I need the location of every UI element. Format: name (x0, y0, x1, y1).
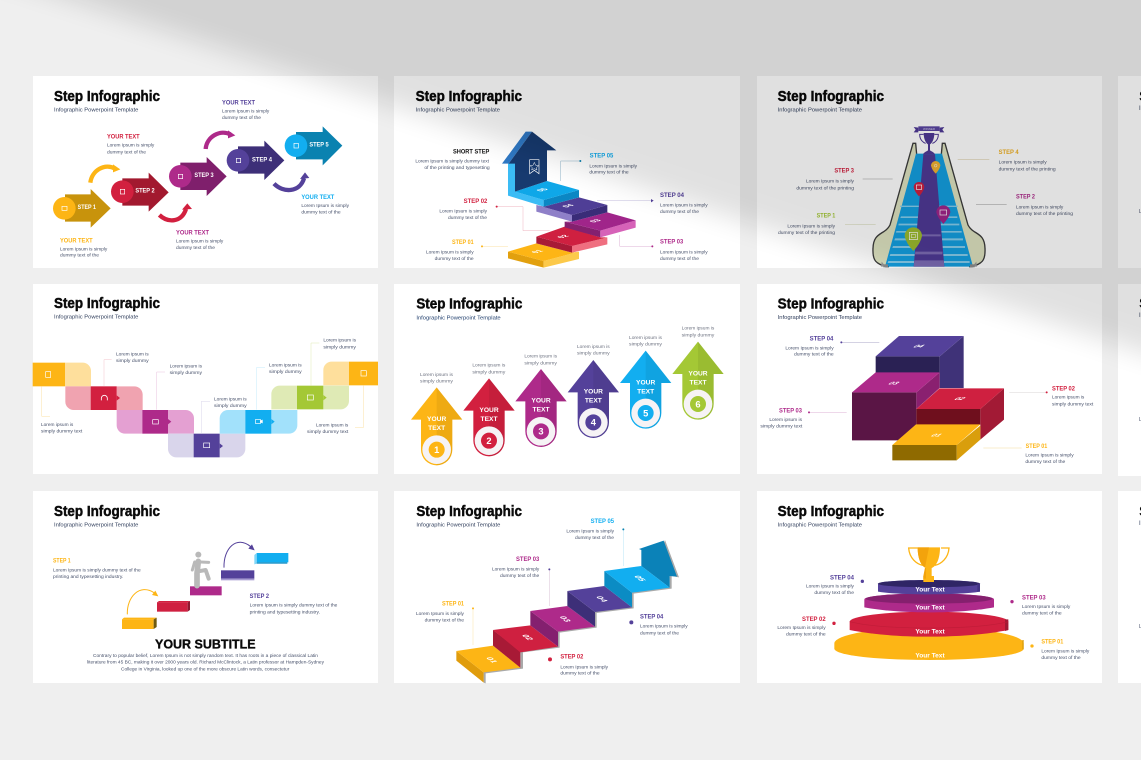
arrow 3: YOUR (531, 398, 551, 405)
callout: step 01: Lorem Ipsum is simply (1041, 648, 1090, 654)
callout: step 2: dummy text of the printing (1016, 211, 1073, 217)
panel: 3D blocks (757, 284, 1102, 474)
callout: step 02 (1009, 385, 1094, 407)
icon: green pin (905, 227, 922, 251)
arrow: step 3 (169, 157, 227, 196)
step 04 purple (536, 197, 607, 222)
bar: purple (221, 570, 254, 580)
callout: step 2: STEP 2 (1016, 194, 1035, 201)
text: arrow 4: Lorem ipsum is (577, 344, 610, 350)
subtitle: Infographic Powerpoint Template (54, 315, 138, 321)
staircase shadow (484, 540, 679, 683)
subtitle: Infographic Powerpoint Template (778, 315, 862, 321)
text: arrow 2: simply dummy (472, 369, 506, 375)
text: block 3 (170, 364, 203, 376)
block 01: 01 (928, 433, 945, 438)
text: step 2: printing and typesetting industry. (250, 609, 320, 615)
title: Step Infographic (778, 504, 884, 520)
text: red callout (107, 134, 155, 155)
text: yellow callout (60, 237, 108, 259)
callout: step 1: Lorem Ipsum is simply (787, 224, 835, 230)
curved arrow: purple (274, 172, 309, 190)
text: blue callout: Lorem Ipsum is simply (301, 203, 349, 209)
text: red callout: YOUR TEXT (107, 134, 140, 141)
disc: yellow (834, 627, 1024, 660)
step 03: 03 (557, 616, 574, 623)
text: step 1: STEP 1 (53, 558, 71, 565)
panel: six up arrows (394, 284, 740, 474)
text: arrow 3: simply dummy (524, 361, 558, 367)
callout: step 1: dummy text of the printing (778, 230, 835, 236)
block: blue (220, 410, 297, 434)
text: arrow 2: Lorem ipsum is (472, 363, 506, 369)
text: purple callout: YOUR TEXT (222, 99, 255, 106)
paragraph (87, 653, 324, 672)
arrow 1: TEXT (428, 425, 445, 432)
text: block 2: Lorem ipsum is (116, 351, 149, 357)
arrow 4: 4 (591, 418, 597, 428)
block 03 (852, 372, 940, 440)
callout: step 01: Lorem Ipsum is simply (416, 611, 464, 617)
block 01 (892, 424, 980, 460)
callout: step 02: STEP 02 (802, 616, 826, 623)
icon: red pin (914, 182, 924, 196)
arrow: step 1: STEP 1 (78, 205, 97, 211)
arrow 2: 2 (486, 436, 492, 446)
arrow 5 (620, 351, 671, 429)
bar: yellow (122, 618, 157, 629)
connector lines (42, 343, 363, 433)
block 04 (876, 336, 964, 388)
callout: step 02: Lorem Ipsum is simply (777, 625, 826, 631)
step 04 purple: 04 (560, 203, 577, 208)
text: short step (415, 148, 490, 171)
panel: zig-zag blocks (33, 284, 378, 474)
bar: magenta (190, 586, 222, 595)
callout: step 4: STEP 4 (999, 149, 1019, 156)
subtitle: Infographic Powerpoint Template (416, 315, 501, 321)
text: block 7 (307, 423, 349, 435)
callout: step 1 (778, 213, 876, 236)
callout: step 04 (629, 613, 688, 636)
paragraph: College in Virginia, looked up one of the more obscure Latin words, consectetur (121, 666, 290, 672)
callout: step 03: STEP 03 (516, 556, 540, 563)
text: arrow 1: Lorem ipsum is (420, 372, 453, 378)
callout: step 04: Lorem Ipsum is simply (785, 345, 834, 351)
labels: your text on discs: Your Text (915, 628, 945, 635)
callout: step 01: dummy text of the (1025, 459, 1066, 465)
text: arrow 5: Lorem ipsum is (629, 335, 662, 341)
callout: step 2 (976, 194, 1073, 217)
callout: step 01: STEP 01 (442, 600, 464, 607)
text: step 2 (250, 593, 338, 615)
text: arrow 4 (577, 344, 610, 357)
text: magenta callout (176, 229, 224, 251)
title: Step Infographic (416, 89, 522, 105)
arrow 1: 1 (434, 445, 439, 455)
arrow 5: 5 (643, 408, 648, 418)
callout: step 05: dummy text of the (589, 170, 629, 176)
callout: step 03 (760, 407, 847, 429)
callout: step 03: STEP 03 (779, 407, 802, 414)
arrow 3: TEXT (532, 407, 550, 414)
step 03 magenta (565, 212, 636, 237)
arrow: step 4: STEP 4 (252, 157, 273, 163)
step 02 red (536, 227, 607, 253)
step 03 (530, 606, 595, 647)
icon: trophy (909, 547, 949, 582)
text: block 4 (214, 397, 247, 409)
title: Step Infographic (778, 89, 884, 105)
panel: arrow steps (33, 76, 378, 268)
panel: diagonal staircase (394, 491, 740, 683)
text: arrow 1: simply dummy (420, 379, 454, 385)
text: short step: Lorem Ipsum is simply dummy text (415, 158, 490, 164)
text: block 2 (116, 351, 149, 364)
callout: step 01 (416, 600, 474, 645)
callout: step 02: dummy text of the (786, 632, 826, 638)
panel: cropped fourth column: I (1139, 313, 1141, 319)
text: arrow 6 (682, 326, 715, 338)
callout: step 01: dummy text of the (1041, 655, 1081, 661)
text: arrow 1 (420, 372, 454, 385)
callout: step 01: Lorem Ipsum is simply (426, 249, 474, 255)
callout: step 03 (620, 235, 708, 262)
callout: step 02: Lorem ipsum is (1052, 395, 1085, 401)
text: block 5: simply dummy (269, 369, 302, 375)
subtitle: Infographic Powerpoint Template (778, 523, 862, 529)
callout: step 05: STEP 05 (590, 153, 614, 160)
text: block 7: Lorem ipsum is (316, 423, 349, 429)
paragraph: Contrary to popular belief, Lorem Ipsum is not simply random text. It has roots in a piece of classical Latin (93, 653, 318, 659)
callout: step 01: dummy text of the (435, 256, 474, 262)
callout: step 01 (1030, 639, 1090, 661)
callout: step 02 (777, 616, 836, 638)
arrow 4 (568, 360, 619, 438)
arrow 6 (672, 342, 724, 420)
text: step 2: Lorem Ipsum is simply dummy text of the (250, 603, 338, 609)
text: short step: of the printing and typesetting (424, 165, 490, 171)
title: Step Infographic (416, 297, 522, 313)
arrow 5: TEXT (637, 388, 654, 395)
arrow 3: 3 (538, 427, 544, 437)
title: Step Infographic (54, 504, 160, 520)
text: block 1: Lorem ipsum is (41, 422, 74, 428)
subtitle: Infographic Powerpoint Template (54, 108, 138, 114)
callout: step 3 (796, 168, 893, 191)
arrow: step 2 (111, 173, 169, 212)
callout: step 02: Lorem Ipsum is simply (439, 208, 487, 214)
labels: your text on discs: Your Text (915, 653, 945, 660)
heading: your subtitle: YOUR SUBTITLE (155, 637, 256, 651)
callout: step 02 (548, 654, 608, 677)
disc: magenta (864, 593, 994, 612)
disc: red (850, 612, 1008, 637)
block: green (271, 386, 349, 409)
callout: step 01 (426, 239, 508, 262)
curved arrow: yellow (127, 590, 158, 614)
icon: trophy: WINNER (923, 127, 936, 131)
panel: podium with trophy (757, 491, 1102, 683)
step 04 (567, 586, 632, 627)
curved arrow: red (159, 203, 192, 220)
callout: step 04 (806, 574, 864, 596)
icon: trophy (914, 126, 944, 154)
text: magenta callout: dummy text of the (176, 245, 215, 251)
text: block 5: Lorem ipsum is (269, 363, 302, 369)
labels: your text on discs: Your Text (915, 604, 945, 611)
step 02 (493, 625, 558, 668)
arrow 6: YOUR (688, 370, 708, 377)
block: purple (168, 434, 245, 457)
icon: magenta pin (936, 205, 950, 224)
callout: step 03: simply dummy text (760, 423, 803, 429)
text: arrow 2 (472, 363, 506, 375)
callout: step 04 (785, 336, 879, 358)
arrow: step 4 (227, 141, 284, 180)
panel: cropped fourth column: I (1139, 106, 1141, 112)
curved arrow: magenta (206, 130, 235, 149)
step 01 yellow: 01 (529, 249, 546, 254)
step 01 yellow (508, 243, 579, 268)
text: yellow callout: Lorem Ipsum is simply (60, 246, 108, 252)
arrow 5: YOUR (636, 379, 655, 386)
block: yellow right (323, 362, 378, 385)
callout: step 04: STEP 04 (830, 574, 854, 581)
text: block 6: simply dummy (323, 344, 357, 350)
callout: step 03 (492, 556, 550, 606)
house arrow with step 05: 05 (534, 187, 551, 192)
block 02: 02 (952, 396, 969, 401)
text: step 1: Lorem Ipsum is simply dummy text of the (53, 567, 141, 573)
title: Step Infographic (416, 504, 522, 520)
callout: step 04: dummy text of the (814, 590, 854, 596)
arrow: step 1 (53, 189, 111, 228)
step 04: 04 (594, 596, 610, 603)
block 04: 04 (911, 344, 928, 348)
house arrow with step 05 (502, 132, 579, 207)
text: magenta callout: YOUR TEXT (176, 229, 209, 236)
text: arrow 3: Lorem ipsum is (524, 354, 557, 360)
callout: step 04: Lorem Ipsum is simply (660, 203, 708, 209)
callout: step 02 (439, 198, 550, 231)
callout: step 3: Lorem Ipsum is simply (806, 179, 854, 185)
step 02 red: 02 (555, 234, 571, 239)
arrow 3 (515, 369, 567, 447)
disc: purple (878, 580, 980, 594)
text: purple callout (222, 99, 270, 121)
text: yellow callout: dummy text of the (60, 253, 99, 259)
paragraph: literature from 45 BC, making it over 2000 years old. Richard McClintock, a Latin professor at Hampden-Sydney (87, 660, 324, 666)
curved arrow: yellow (90, 164, 120, 183)
callout: step 02: STEP 02 (464, 198, 488, 205)
panel: escalator (757, 76, 1102, 268)
panel: cropped fourth column: I (1139, 521, 1141, 527)
text: blue callout (301, 194, 349, 216)
callout: step 4 (958, 149, 1056, 172)
text: block 2: simply dummy (116, 358, 149, 364)
text: step 1: printing and typesetting industry. (53, 574, 123, 580)
callout: step 4: Lorem Ipsum is simply (999, 160, 1047, 166)
text: step 1 (53, 558, 141, 580)
callout: step 04: dummy text of the (794, 352, 834, 358)
callout: step 05 (566, 518, 624, 566)
callout: step 05: Lorem Ipsum is simply (566, 529, 614, 535)
callout: step 04: STEP 04 (660, 192, 684, 199)
callout: step 01: STEP 01 (1026, 443, 1048, 450)
text: arrow 6: simply dummy (682, 332, 715, 338)
text: arrow 3 (524, 354, 558, 367)
text: blue callout: dummy text of the (301, 210, 341, 216)
step 01: 01 (484, 657, 500, 664)
text: short step: SHORT STEP (453, 148, 489, 155)
callout: step 01: dummy text of the (425, 618, 464, 624)
arrow 6: 6 (695, 399, 701, 409)
callout: step 03: STEP 03 (660, 239, 684, 246)
text: arrow 5: simply dummy (629, 342, 663, 348)
bar: red (157, 601, 190, 612)
title: Step Infographic (54, 296, 160, 312)
text: yellow callout: YOUR TEXT (60, 237, 93, 244)
text: arrow 6: Lorem ipsum is (682, 326, 715, 332)
block 02 (916, 388, 1004, 440)
text: purple callout: dummy text of the (222, 115, 261, 121)
block: red (65, 386, 143, 410)
curved arrow: purple (224, 542, 255, 568)
subtitle: Infographic Powerpoint Template (54, 523, 138, 529)
callout: step 03: Lorem Ipsum is simply (492, 567, 540, 573)
labels: your text on discs (915, 587, 945, 660)
text: magenta callout: Lorem Ipsum is simply (176, 238, 224, 244)
callout: step 04 (597, 192, 708, 215)
text: step 2: STEP 2 (250, 593, 269, 600)
callout: step 05: STEP 05 (591, 518, 614, 525)
panel: isometric stairs with house arrow (394, 76, 740, 268)
text: blue callout: YOUR TEXT (301, 194, 334, 201)
text: block 5 (269, 363, 302, 375)
callout: step 01: STEP 01 (1041, 639, 1064, 646)
text: red callout: dummy text of the (107, 149, 146, 155)
text: block 4: Lorem ipsum is (214, 397, 247, 403)
labels: your text on discs: Your Text (915, 587, 945, 594)
callout: step 05: dummy text of the (575, 535, 614, 541)
text: arrow 4: simply dummy (577, 351, 610, 357)
callout: step 4: dummy text of the printing (999, 166, 1056, 172)
callout: step 1: STEP 1 (817, 213, 836, 220)
text: red callout: Lorem Ipsum is simply (107, 143, 155, 149)
callout: step 02: STEP 02 (560, 654, 584, 661)
arrow: step 5 (285, 126, 342, 165)
bar: blue (254, 553, 288, 564)
text: block 6 (323, 338, 357, 350)
callout: step 04: STEP 04 (640, 613, 664, 620)
callout: step 02: dummy text of the (560, 671, 600, 677)
panel: stepping bars with subtitle (33, 491, 378, 683)
callout: step 3: dummy text of the printing (796, 185, 854, 191)
arrow 6: TEXT (689, 379, 707, 386)
callout: step 02: Lorem Ipsum is simply (560, 664, 608, 670)
text: block 1 (41, 422, 83, 435)
callout: step 03: dummy text of the (500, 573, 540, 579)
panel: cropped fourth column (1118, 76, 1141, 683)
arrow: step 5: STEP 5 (309, 142, 329, 148)
arrow 2: TEXT (480, 416, 498, 423)
arrow 2: YOUR (479, 407, 499, 414)
callout: step 04: dummy text of the (640, 630, 679, 636)
subtitle: Infographic Powerpoint Template (778, 108, 862, 114)
text: block 7: simply dummy text (307, 429, 349, 435)
callout: step 05: Lorem Ipsum is simply (589, 163, 637, 169)
callout: step 03: Lorem Ipsum is simply (1022, 604, 1071, 610)
subtitle: Infographic Powerpoint Template (416, 108, 500, 114)
icon: climbing person (192, 552, 209, 586)
callout: step 3: STEP 3 (834, 168, 854, 175)
step 05 with arrow: 05 (632, 575, 648, 582)
step 05 with arrow (604, 541, 677, 607)
callout: step 2: Lorem Ipsum is simply (1016, 205, 1064, 211)
callout: step 01: Lorem Ipsum is simply (1025, 453, 1074, 459)
callout: step 05 (561, 153, 637, 181)
block: magenta (117, 410, 194, 434)
text: block 1: simply dummy text (41, 429, 83, 435)
callout: step 02: dummy text of the (448, 215, 487, 221)
arrow 2 (463, 378, 515, 456)
arrow 1: YOUR (427, 416, 446, 423)
callout: step 01: STEP 01 (452, 239, 474, 246)
callout: step 02: simply dummy text (1052, 401, 1094, 407)
title: Step Infographic (778, 297, 884, 313)
callout: step 01 (983, 443, 1074, 465)
text: arrow 5 (629, 335, 663, 348)
text: block 6: Lorem ipsum is (323, 338, 356, 344)
arrow 4: YOUR (584, 389, 603, 396)
subtitle: Infographic Powerpoint Template (416, 523, 500, 529)
callout: step 04: STEP 04 (810, 336, 834, 343)
icon: yellow pin (931, 161, 940, 174)
callout: step 03: Lorem ipsum is (769, 417, 802, 423)
text: block 3: Lorem ipsum is (170, 364, 202, 370)
block: yellow left (33, 363, 91, 386)
step 02: 02 (519, 634, 536, 641)
callout: step 02: STEP 02 (1052, 385, 1075, 392)
text: block 3: simply dummy (170, 370, 203, 376)
callout: step 04: dummy text of the (660, 209, 699, 215)
arrow: step 3: STEP 3 (194, 173, 214, 179)
block 03: 03 (886, 381, 903, 385)
callout: step 03: STEP 03 (1022, 594, 1046, 601)
text: block 4: simply dummy (214, 403, 247, 409)
arrow: step 2: STEP 2 (135, 189, 155, 195)
callout: step 03 (1010, 594, 1071, 617)
callout: step 04: Lorem Ipsum is simply (640, 624, 688, 630)
callout: step 03: dummy text of the (1022, 611, 1062, 617)
arrow 4: TEXT (585, 398, 602, 405)
text: purple callout: Lorem Ipsum is simply (222, 108, 270, 114)
callout: step 03: dummy text of the (660, 256, 699, 262)
step 01 (456, 646, 521, 683)
title: Step Infographic (54, 89, 160, 105)
callout: step 04: Lorem Ipsum is simply (806, 583, 854, 589)
callout: step 03: Lorem Ipsum is simply (660, 250, 708, 256)
arrow 1 (411, 387, 462, 465)
escalator (873, 143, 985, 267)
step 03 magenta: 03 (587, 218, 604, 223)
